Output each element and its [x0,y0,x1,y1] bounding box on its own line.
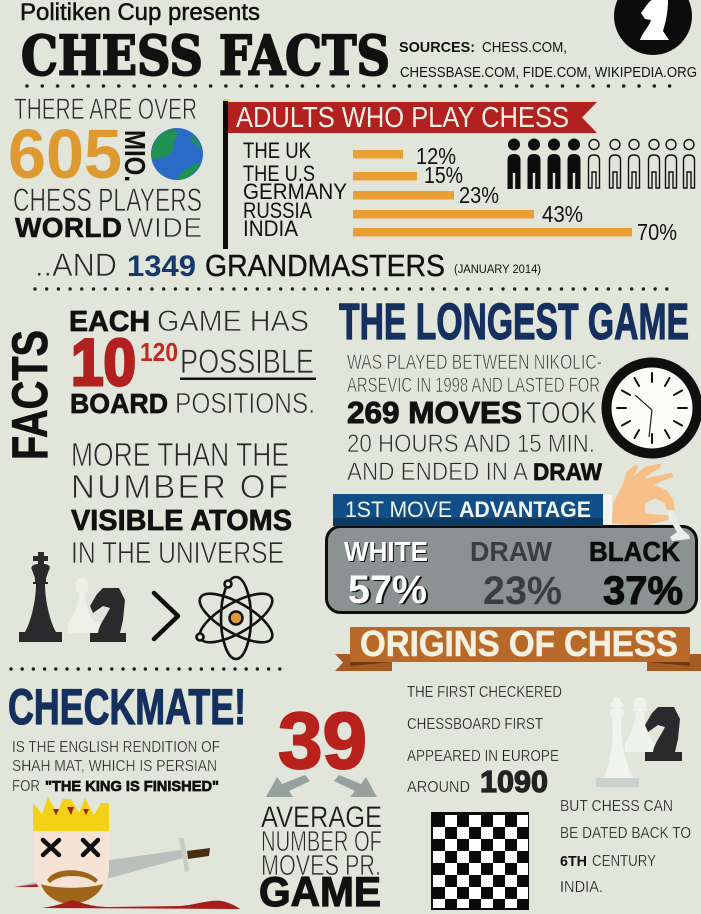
blood [42,900,240,909]
stat: 605 million players: CHESS PLAYERS [13,182,202,218]
text: first checkered chessboard: AROUND [407,779,470,796]
banner title: ADULTS WHO PLAY CHESS [236,102,569,134]
stat: 39 average moves: MOVES PR. [261,850,381,882]
arrows [266,775,377,797]
white stat [344,536,429,613]
banner title [345,497,591,522]
grandmasters line: (JANUARY 2014) [454,264,541,276]
text: first checkered chessboard [407,684,562,799]
text: first checkered chessboard: 1090 [480,764,548,799]
crossed eyes [43,840,98,855]
text: sixth century india [560,798,691,896]
beard [41,884,103,904]
heading: facts: FACTS [2,330,58,460]
country labels [243,138,347,241]
icon: clock [606,362,698,454]
country labels: RUSSIA [243,198,312,223]
values: 23% [459,182,499,208]
heading: checkmate: CHECKMATE! [8,679,246,735]
values: 43% [542,201,583,227]
icon: hand [603,463,675,528]
text: checkmate explanation [12,739,220,795]
values: 15% [424,162,463,188]
stat: 39 average moves: NUMBER OF [261,826,382,858]
text: sixth century india: 6TH [560,854,587,870]
fact: board positions: EACH [69,306,150,338]
fact: board positions [69,305,316,420]
text: longest game details: 269 MOVES [347,395,522,430]
bars [353,150,632,236]
grandmasters line: GRANDMASTERS [205,248,445,283]
sword [14,850,183,887]
banner [228,102,597,133]
panel: first move advantage [326,494,696,613]
text: sixth century india: CENTURY [592,853,656,870]
fact: visible atoms: MORE THAN THE [71,436,289,473]
fact: board positions: GAME HAS [157,305,309,338]
chart: adults who play chess [223,99,677,249]
draw stat [470,536,562,613]
stat: 39 average moves [259,696,382,914]
text: checkmate explanation: IS THE ENGLISH RENDITION OF [12,739,220,756]
black stat [589,536,683,613]
values: 70% [637,219,677,245]
white stat: WHITE [345,537,429,568]
banner [333,494,603,526]
fact: visible atoms: IN THE UNIVERSE [71,535,284,570]
text: first checkered chessboard: APPEARED IN EUROPE [407,748,559,765]
grandmasters line: 1349 [127,250,196,283]
draw stat: DRAW [470,536,553,567]
banner: origins of chess: ORIGINS OF CHESS [360,623,678,664]
white stat: WHITE [344,536,428,567]
illustration: dead king [14,797,240,909]
fact: visible atoms: NUMBER OF [71,468,288,505]
text: sixth century india: INDIA. [560,879,603,896]
country labels: GERMANY [243,179,347,204]
icon: globe [151,128,203,180]
sources: CHESS.COM, [482,40,567,56]
icon: held pawn [668,510,690,541]
icon: greater than [154,593,178,639]
grandmasters line [35,247,541,283]
banner title: 1ST MOVE [345,497,452,522]
text: longest game details: DRAW [533,459,602,486]
sources [399,39,697,81]
title: CHESS FACTS [21,24,390,88]
text: checkmate explanation: "THE KING IS FINISHED" [45,778,219,795]
text: first checkered chessboard: THE FIRST CHECKERED [407,684,562,701]
stat: 605 million players: THERE ARE OVER [14,93,197,126]
stat: 605 million players: 605 [8,115,122,193]
text: longest game details: AND ENDED IN A [347,458,528,486]
stat: 605 million players: WIDE [127,212,202,243]
icon: chess pieces small [596,697,682,787]
fact: board positions: POSSIBLE [180,343,314,381]
icon: atom [193,577,279,659]
text: longest game details: WAS PLAYED BETWEEN NIKOLIC- [347,351,602,374]
stat: 605 million players [8,93,202,243]
icon: people pictogram [508,138,694,189]
head [33,830,109,904]
text: longest game details [347,351,602,486]
text: checkmate explanation: FOR [12,778,40,795]
icon: knight badge [614,0,692,55]
stat: 605 million players: MIO. [118,130,150,182]
values: 12% [416,143,456,169]
sources: SOURCES: [399,39,475,56]
icon: chessboard [431,812,529,910]
text: longest game details: ARSEVIC IN 1998 AND LASTED FOR [347,374,600,397]
stat: 39 average moves: AVERAGE [261,801,382,834]
fact: board positions: 10 [71,325,136,399]
text: longest game details: 20 HOURS AND 15 MIN. [347,430,595,458]
text: sixth century india: BUT CHESS CAN [560,798,673,815]
fact: board positions: BOARD [70,388,168,419]
text: first checkered chessboard: CHESSBOARD FIRST [407,716,543,733]
white stat: 57% [348,568,427,612]
black stat: 37% [603,569,683,613]
fact: board positions: 120 [140,337,178,367]
fact: visible atoms: VISIBLE ATOMS [71,505,292,537]
text: longest game details: TOOK [526,395,597,430]
stat: 39 average moves: 39 [278,696,367,785]
stat: 39 average moves: GAME [259,868,381,914]
values [416,143,677,245]
fact: visible atoms [71,436,292,570]
panel body [326,526,696,612]
icon: chess pieces [19,552,126,642]
grandmasters line: ..AND [35,247,117,283]
country labels: THE U.S [243,161,315,186]
banner title: ADVANTAGE [459,497,591,522]
country labels: THE UK [243,138,311,163]
crown [33,797,109,831]
fact: board positions: POSITIONS. [175,388,315,420]
draw stat: 23% [483,569,562,613]
stat: 605 million players: WORLD [15,212,122,243]
white stat: 57% [350,569,429,613]
country labels: INDIA [243,216,298,241]
text: checkmate explanation: SHAH MAT, WHICH IS PERSIAN [12,758,217,775]
black stat: BLACK [589,536,680,567]
